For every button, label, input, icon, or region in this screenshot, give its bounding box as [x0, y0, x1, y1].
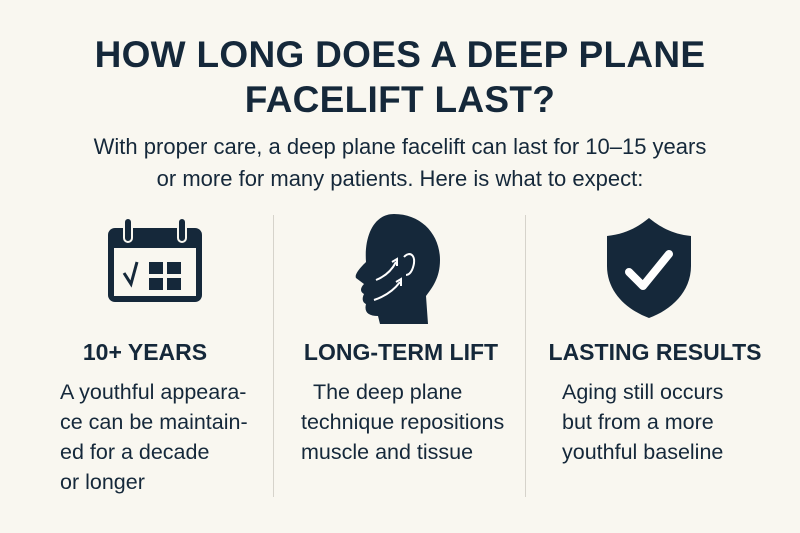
- text: col3: Aging still occurs: [562, 380, 723, 404]
- icon: shield with check: [607, 218, 691, 318]
- title: HOW LONG DOES A DEEP PLANE: [95, 34, 705, 75]
- heading: lasting results: LASTING RESULTS: [549, 339, 761, 365]
- text: col3: [562, 380, 723, 464]
- text: col2: technique repositions: [301, 410, 504, 434]
- text: col1: [60, 380, 248, 494]
- subtitle: or more for many patients. Here is what to expect:: [157, 166, 643, 191]
- title: [95, 34, 705, 120]
- heading: 10+ years: 10+ YEARS: [83, 339, 207, 365]
- heading: long-term lift: LONG-TERM LIFT: [304, 339, 498, 365]
- text: col2: The deep plane: [313, 380, 462, 404]
- text: col2: muscle and tissue: [301, 440, 473, 464]
- text: col1: or longer: [60, 470, 145, 494]
- text: col1: A youthful appeara-: [60, 380, 246, 404]
- text: col1: ed for a decade: [60, 440, 209, 464]
- text: col3: but from a more: [562, 410, 714, 434]
- icon: calendar: [108, 219, 202, 302]
- title: FACELIFT LAST?: [245, 79, 555, 120]
- text: col1: ce can be maintain-: [60, 410, 248, 434]
- subtitle: With proper care, a deep plane facelift can last for 10–15 years: [94, 134, 706, 159]
- text: col2: [301, 380, 504, 464]
- text: col3: youthful baseline: [562, 440, 723, 464]
- icon: head with lift arrows: [356, 214, 440, 324]
- subtitle: [94, 134, 706, 191]
